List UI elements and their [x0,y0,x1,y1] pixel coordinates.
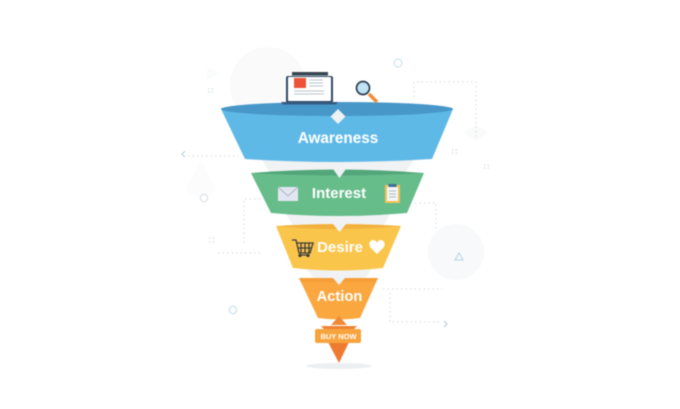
funnel ground shadow [306,363,372,369]
funnel stage: Interest [251,169,424,216]
icon: magnifying glass [356,82,377,102]
funnel stage: Awareness [221,102,453,162]
icon: clipboard [385,184,400,203]
funnel stage: Action: Action [317,289,362,305]
funnel stage: Interest: Interest [312,185,366,202]
icon: shopping cart [292,240,313,256]
icon: envelope [278,187,298,201]
funnel stage: Action [299,277,378,320]
icon: laptop [281,72,338,104]
buy now button [315,316,361,363]
buy now button: BUY NOW [320,332,357,341]
funnel stage: Desire: Desire [317,239,363,256]
background decorations [182,47,490,327]
funnel stage: Desire [276,224,401,270]
icon: heart [369,240,385,254]
funnel connector shadows [262,160,414,279]
funnel stage: Awareness: Awareness [298,130,378,147]
